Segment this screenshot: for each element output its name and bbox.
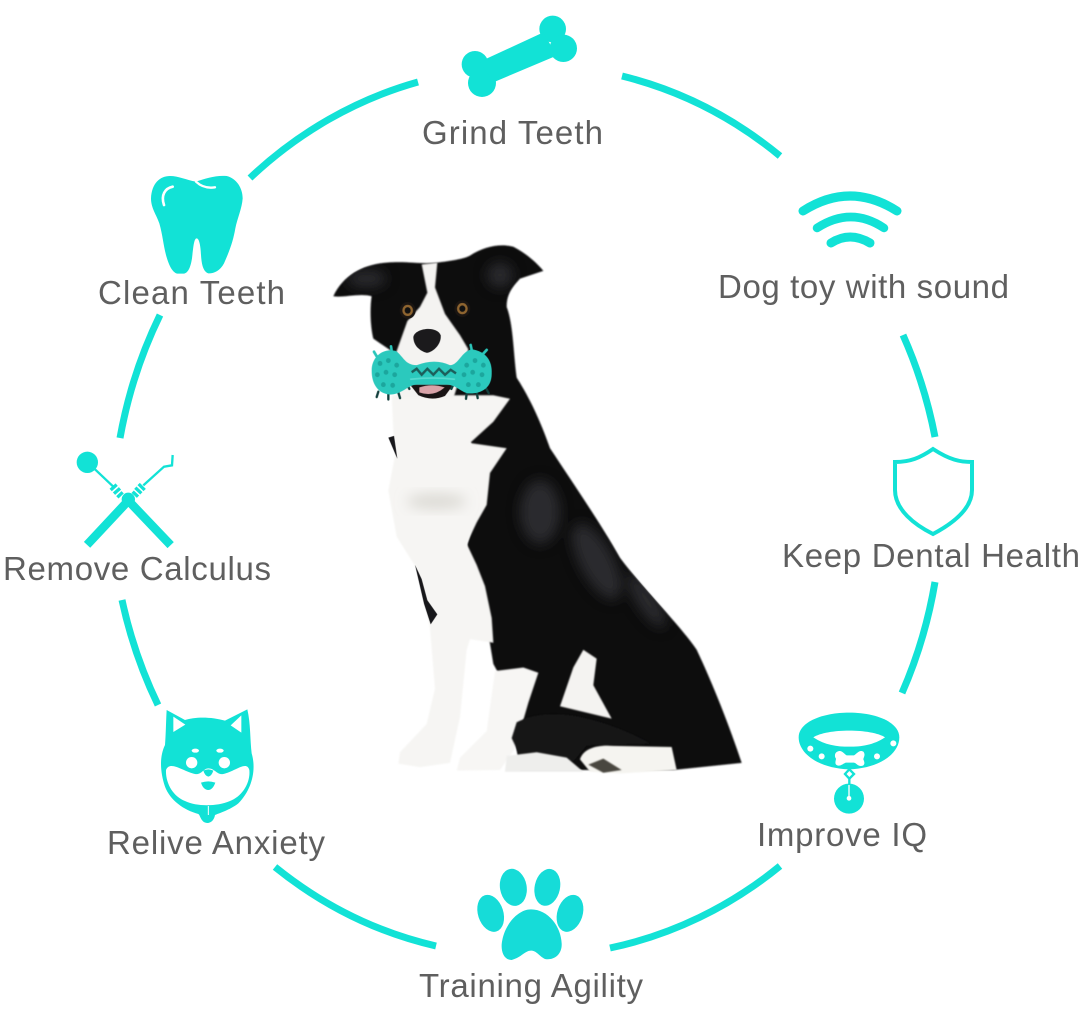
heading: Improve IQ: Improve IQ (757, 816, 927, 853)
heading: Training Agility: Training Agility (419, 967, 644, 1004)
icon: shiba dog face (161, 709, 254, 823)
ring of arc segments (120, 76, 935, 948)
rear paw (580, 746, 677, 773)
heading: Relive Anxiety: Relive Anxiety (107, 824, 326, 861)
head face white blaze (396, 263, 468, 399)
white chest and front legs (388, 395, 510, 767)
nose (413, 329, 441, 353)
icon: bone (462, 16, 577, 97)
icon: collar with bone tag (799, 713, 899, 814)
heading: Remove Calculus: Remove Calculus (3, 550, 271, 587)
rear paw pads (588, 759, 622, 773)
dog body and head silhouette (333, 245, 742, 770)
heading: Keep Dental Health: Keep Dental Health (782, 537, 1080, 574)
fur highlights (347, 263, 672, 632)
tail (512, 714, 650, 761)
black chest markings (388, 436, 437, 624)
mouth and tongue (410, 385, 453, 399)
icon: paw print (473, 866, 588, 960)
heading: Clean Teeth: Clean Teeth (98, 274, 285, 311)
heading: Grind Teeth: Grind Teeth (422, 114, 603, 151)
tail white tip (505, 752, 583, 772)
second front leg (457, 667, 538, 771)
eyes (400, 300, 470, 319)
icon: shield (895, 449, 972, 534)
hip white patch (560, 650, 612, 719)
photo: border collie holding teal toy (333, 245, 742, 773)
icon: dental tools (77, 452, 173, 542)
teal dental toy (372, 345, 492, 399)
icon: tooth (151, 176, 243, 274)
heading: Dog toy with sound: Dog toy with sound (718, 268, 1009, 305)
icon: wifi sound waves (803, 196, 897, 243)
chest shading (407, 494, 467, 509)
